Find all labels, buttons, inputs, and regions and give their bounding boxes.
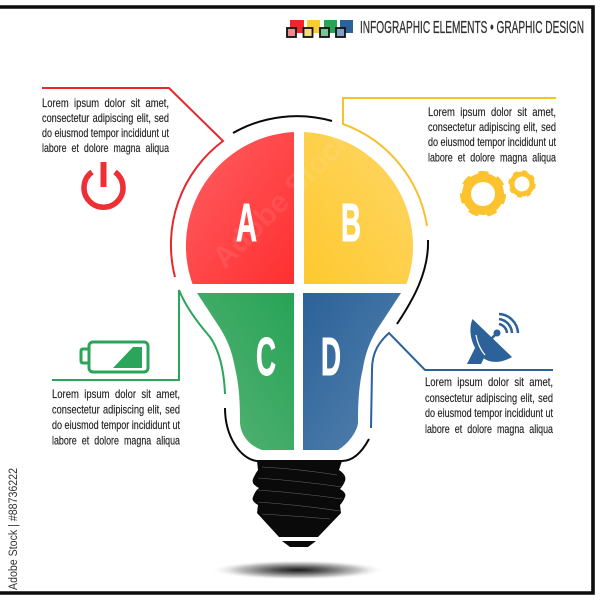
panel: bottom right blue: [371, 314, 553, 436]
green connector: [52, 290, 225, 394]
text block: labore et dolore magna aliqua: [425, 422, 553, 436]
lightbulb: [186, 116, 428, 547]
text block: consectetur adipiscing elit, sed: [52, 402, 180, 416]
segment C: C: [256, 327, 276, 387]
icon: satellite dish: [467, 314, 518, 364]
icon: power: [84, 162, 123, 207]
text block: consectetur adipiscing elit, sed: [42, 111, 169, 125]
text block: do eiusmod tempor incididunt ut: [425, 406, 553, 420]
segment B: B: [341, 193, 361, 253]
header: [287, 17, 584, 37]
bulb outline black: [225, 116, 428, 461]
segment B: [304, 132, 413, 284]
text block: labore et dolore magna aliqua: [42, 141, 169, 155]
watermark: Adobe Stock: [207, 122, 360, 275]
text block: Lorem ipsum dolor sit amet,: [428, 105, 556, 119]
yellow connector: [343, 98, 556, 226]
segment D: [303, 293, 401, 450]
text block: [52, 387, 180, 448]
blue connector: [371, 333, 553, 428]
text block: labore et dolore magna aliqua: [428, 150, 556, 164]
text block: Lorem ipsum dolor sit amet,: [42, 96, 169, 110]
text block: do eiusmod tempor incididunt ut: [52, 418, 180, 432]
text block: Lorem ipsum dolor sit amet,: [52, 387, 180, 401]
text block: Lorem ipsum dolor sit amet,: [425, 375, 553, 389]
text block: labore et dolore magna aliqua: [52, 434, 180, 448]
text block: [425, 375, 553, 436]
text block: consectetur adipiscing elit, sed: [425, 391, 553, 405]
text block: [42, 96, 169, 155]
segment C: [197, 293, 294, 450]
red connector: [42, 88, 223, 277]
panel: top left red: [42, 88, 223, 277]
text block: do eiusmod tempor incididunt ut: [428, 135, 556, 149]
text block: do eiusmod tempor incididunt ut: [42, 126, 169, 140]
icon: battery: [81, 342, 148, 372]
text block: [428, 105, 556, 164]
screw base: [253, 461, 345, 547]
shadow: [210, 560, 386, 580]
segment A: A: [236, 193, 257, 253]
panel: bottom left green: [52, 290, 225, 448]
text block: consectetur adipiscing elit, sed: [428, 120, 556, 134]
icon: gears: [463, 172, 534, 214]
stock id: Adobe Stock | #88736222: [8, 468, 20, 590]
segment A: [186, 132, 294, 284]
panel: top right yellow: [343, 98, 556, 226]
legend squares: [287, 20, 353, 37]
segment D: D: [321, 327, 341, 387]
